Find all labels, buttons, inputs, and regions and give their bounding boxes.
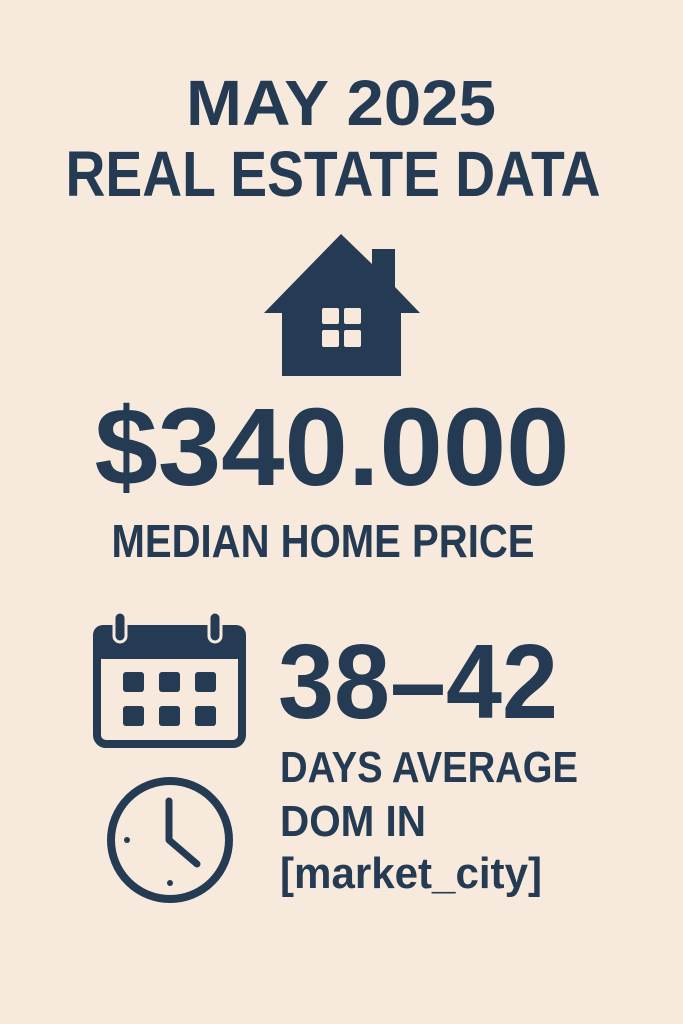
DOM label: DOM IN — [280, 797, 426, 846]
DOM label: [market_city] — [280, 849, 542, 898]
title: REAL ESTATE DATA — [66, 138, 600, 210]
DOM value: 38–42 — [278, 623, 558, 741]
icon: clock — [111, 781, 229, 899]
title — [66, 67, 600, 210]
DOM label: DAYS AVERAGE — [280, 743, 578, 792]
icon: house — [264, 234, 420, 376]
icon: calendar — [93, 612, 246, 744]
median price value: $340.000 — [94, 386, 570, 509]
DOM label — [280, 743, 578, 898]
title: MAY 2025 — [186, 67, 496, 139]
median price label: MEDIAN HOME PRICE — [112, 515, 534, 567]
